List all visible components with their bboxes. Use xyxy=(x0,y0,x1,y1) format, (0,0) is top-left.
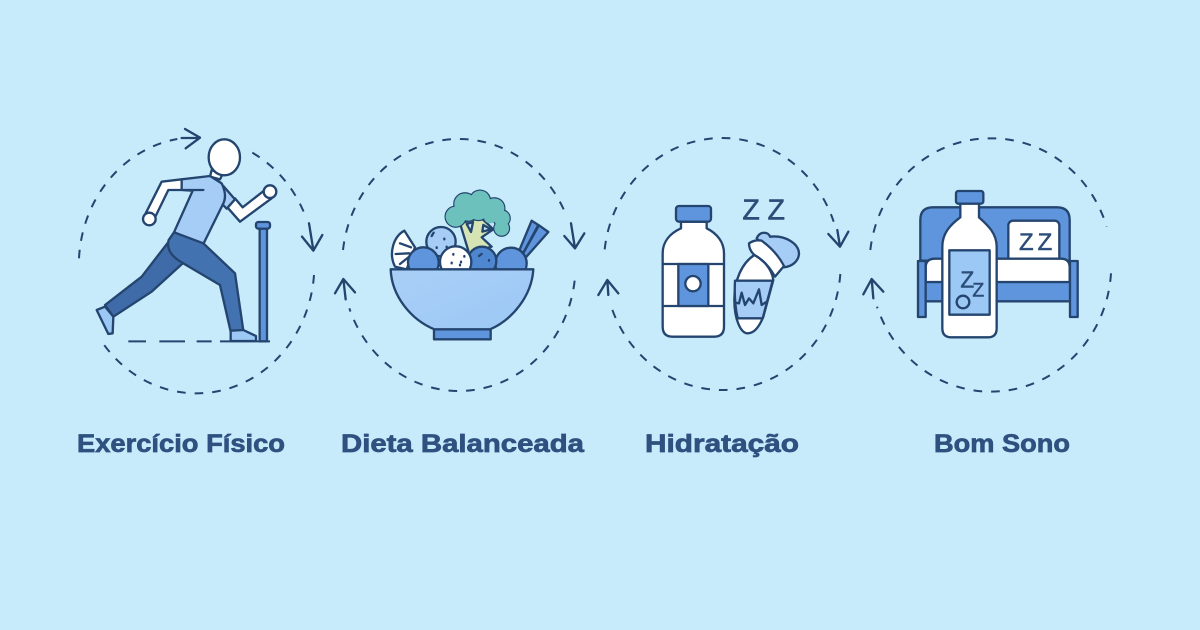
panel: hydration icon with cycle arrows xyxy=(598,138,848,390)
bed: ZZ xyxy=(1019,229,1052,256)
label: Exercício Físico: Exercício Físico xyxy=(77,430,285,458)
dashed cycle ring xyxy=(605,138,840,390)
arrow: left xyxy=(598,280,618,295)
label: Hidratação: Hidratação xyxy=(645,430,799,458)
label: Bom Sono: Bom Sono xyxy=(934,430,1070,458)
panel: good sleep icon with cycle arrows xyxy=(863,138,1111,392)
broccoli xyxy=(446,191,510,253)
dashed cycle ring xyxy=(343,139,575,391)
ground line xyxy=(128,338,270,344)
small bottle with pulse xyxy=(734,233,799,333)
post xyxy=(256,222,270,341)
arrow: right xyxy=(828,230,848,247)
bowl xyxy=(391,269,533,339)
sleep letters: ZZ xyxy=(742,194,785,226)
vegetable sticks xyxy=(518,221,548,258)
arrow: left xyxy=(335,279,355,299)
arrow: right xyxy=(564,223,584,248)
runner figure xyxy=(97,139,276,341)
dashed cycle ring xyxy=(870,138,1111,392)
bottle: Z xyxy=(960,266,974,292)
label: Dieta Balanceada: Dieta Balanceada xyxy=(341,430,585,458)
panel: exercise icon with cycle arrows xyxy=(79,129,322,393)
dashed cycle ring xyxy=(79,139,314,393)
bottle: Z xyxy=(972,281,984,302)
bottle xyxy=(942,191,997,337)
fruits xyxy=(408,227,527,279)
lemon wedge xyxy=(392,231,415,269)
arrow: top xyxy=(182,129,200,148)
arrow: right xyxy=(302,223,322,251)
bed xyxy=(918,207,1078,317)
panel: balanced diet icon with cycle arrows xyxy=(335,139,584,391)
arrow: left xyxy=(863,279,883,298)
water bottle xyxy=(663,206,724,337)
